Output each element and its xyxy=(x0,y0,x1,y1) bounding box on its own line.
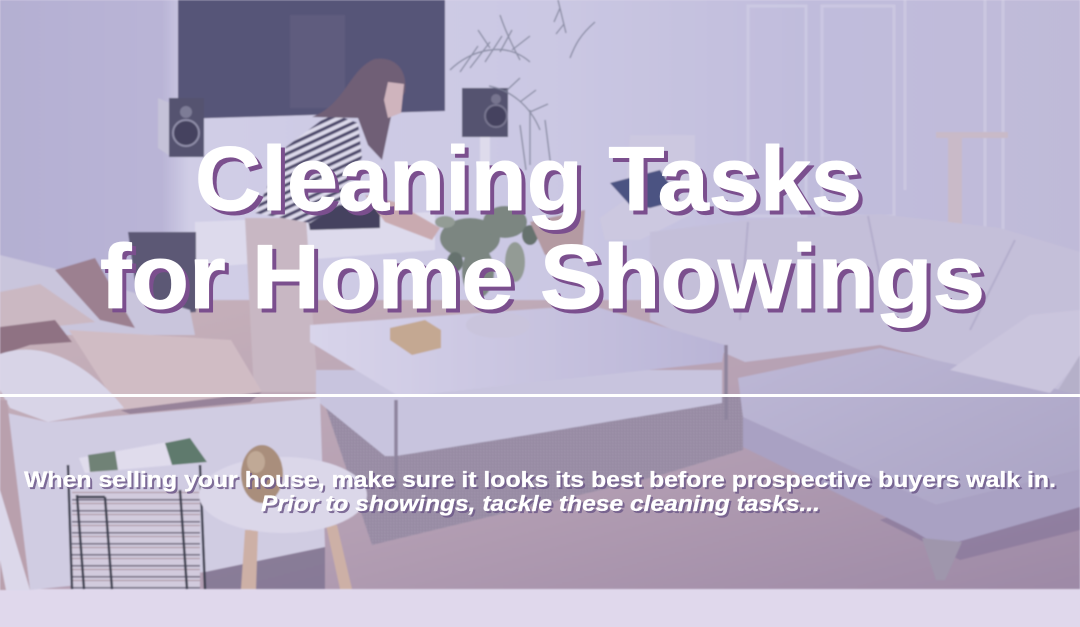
subwoofer xyxy=(128,232,196,317)
intro text xyxy=(24,467,1058,518)
woman striped shirt xyxy=(255,113,362,223)
round side table xyxy=(199,457,367,533)
woman arm xyxy=(365,195,440,240)
title shadow: Cleaning Tasks xyxy=(199,133,866,234)
floor shadow under chaise xyxy=(880,450,1080,560)
palm plant xyxy=(450,0,595,175)
right pillow xyxy=(950,310,1080,393)
gold ball xyxy=(241,445,283,503)
pillow right edge xyxy=(1058,355,1080,395)
armchair xyxy=(600,135,695,240)
magazine green spine xyxy=(165,438,207,465)
magazine green cover xyxy=(88,451,118,472)
table legs xyxy=(396,345,726,490)
stool legs xyxy=(241,525,352,589)
intro shadow xyxy=(26,469,1058,518)
wooden wall shelf xyxy=(936,132,1008,227)
intro shadow: When selling your house, make sure it looks its best before prospective buyers walk in. xyxy=(26,469,1058,494)
woman face xyxy=(384,82,404,118)
intro lines xyxy=(24,467,1056,516)
title text: for Home Showings xyxy=(100,227,985,328)
title shadow: for Home Showings xyxy=(104,231,989,332)
table plant xyxy=(435,206,538,298)
magazine rack xyxy=(68,465,205,589)
white sofa side edge xyxy=(0,490,30,590)
beige pillow xyxy=(69,330,262,410)
woman hair xyxy=(312,59,405,160)
dark box on console xyxy=(305,205,380,230)
sofa back cushion seams xyxy=(740,216,1015,330)
television xyxy=(178,0,445,119)
striped feather cushion xyxy=(55,258,135,328)
gold ball highlight xyxy=(247,451,265,473)
coffee table lower shelf xyxy=(316,370,722,456)
white round cushion xyxy=(0,350,124,422)
title xyxy=(100,129,989,332)
cushion shadow xyxy=(120,392,262,414)
fur throw xyxy=(0,284,95,332)
television reflection xyxy=(290,15,345,108)
woman pants xyxy=(245,218,318,392)
media console xyxy=(195,212,435,268)
floor shadow below sofa xyxy=(205,547,325,589)
glass bowl xyxy=(466,312,530,338)
left floor strip xyxy=(0,400,30,590)
floor xyxy=(0,300,1080,589)
chaise sofa front xyxy=(743,417,1080,547)
intro lines: When selling your house, make sure it looks its best before prospective buyers walk in. xyxy=(24,467,1056,492)
bottom lavender band xyxy=(0,589,1080,627)
plant pot xyxy=(530,210,585,255)
coffee table top xyxy=(310,305,725,397)
sofa foot xyxy=(922,538,962,580)
title text xyxy=(100,129,985,328)
chaise sofa top xyxy=(738,348,1080,505)
left speaker xyxy=(158,98,204,157)
divider line xyxy=(0,394,1080,397)
left sofa body xyxy=(7,398,325,590)
tissue box xyxy=(390,320,441,355)
right speaker xyxy=(462,88,508,177)
right sofa back xyxy=(650,214,1080,400)
wall xyxy=(0,0,1080,330)
blue pillow xyxy=(610,170,680,208)
title shadow xyxy=(104,133,989,332)
brown throw xyxy=(0,320,72,355)
intro lines: Prior to showings, tackle these cleaning tasks... xyxy=(261,491,820,516)
intro shadow: Prior to showings, tackle these cleaning tasks... xyxy=(263,493,822,518)
right windows and doors xyxy=(748,0,1003,245)
rug xyxy=(325,395,745,545)
magazine on top of rack xyxy=(79,438,207,473)
sofa back behind cushions xyxy=(0,255,195,335)
title text: Cleaning Tasks xyxy=(195,129,862,230)
